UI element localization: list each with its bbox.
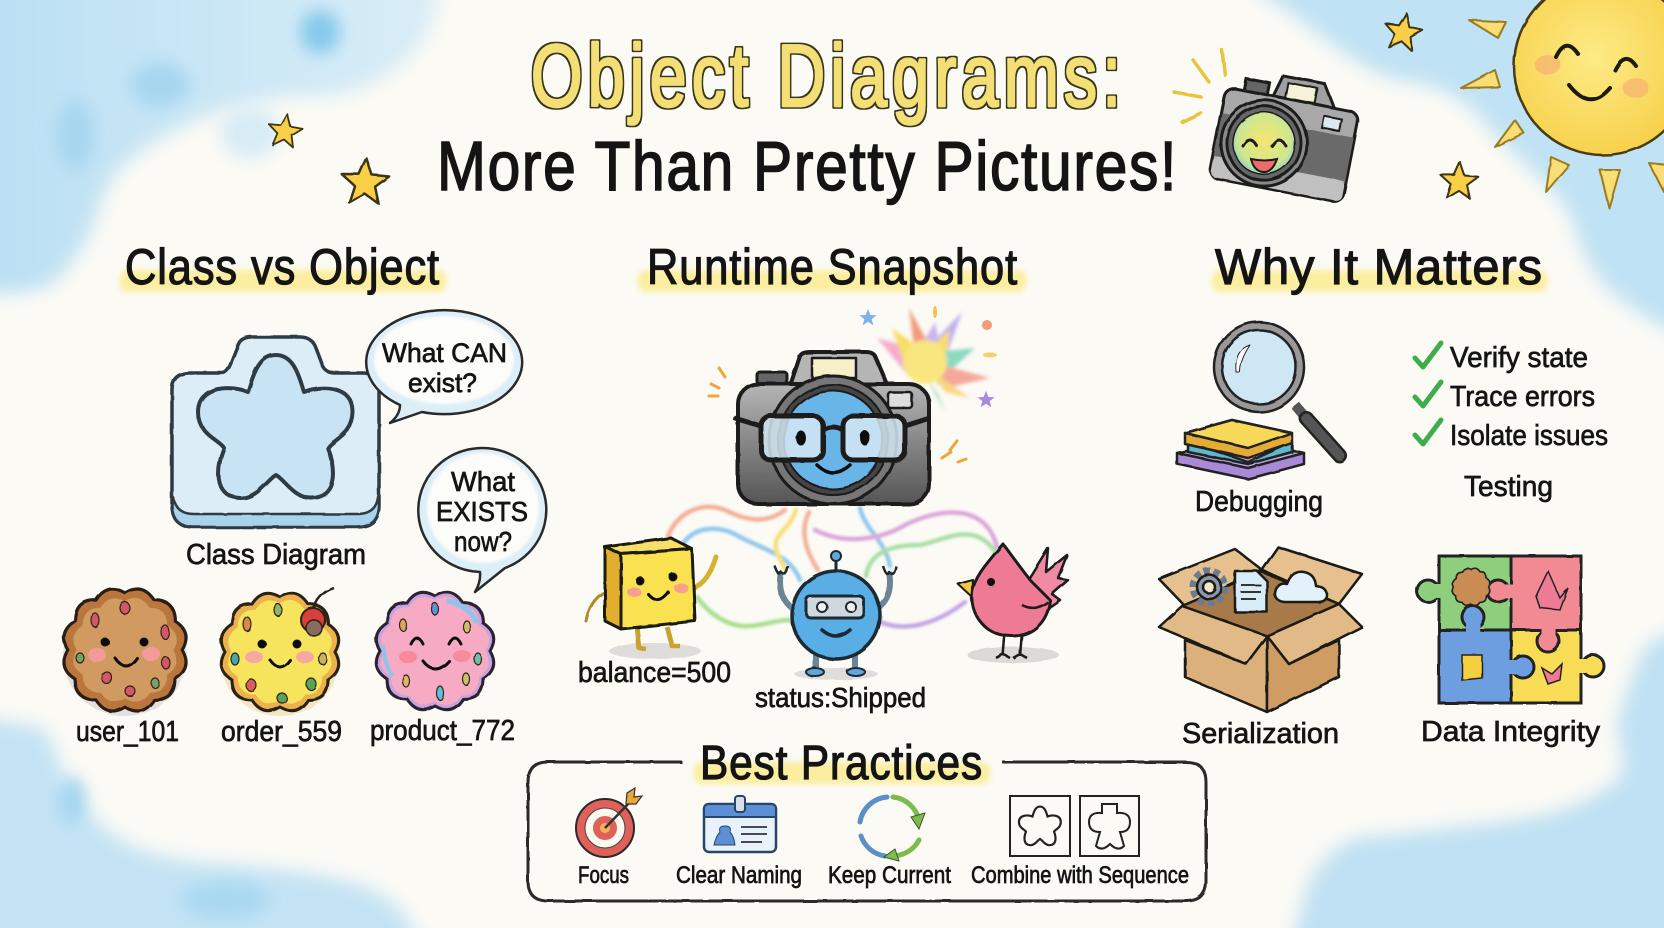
label: Serialization: Serialization [1182, 718, 1339, 750]
title line 2: More Than Pretty Pictures! [437, 127, 1178, 205]
camera flash rays [1174, 50, 1225, 122]
books [1177, 420, 1304, 479]
character: pink bird [958, 544, 1068, 663]
check 3: Isolate issues [1450, 420, 1608, 452]
icon: name badge [704, 796, 776, 852]
rainbow burst [859, 306, 997, 412]
check 1: Verify state [1450, 342, 1588, 374]
heading highlight [638, 270, 1026, 292]
burst sparks [859, 306, 997, 407]
speech bubble: What EXISTS now?: EXISTS [436, 496, 528, 527]
label: order_559: order_559 [221, 716, 342, 748]
icon: target [576, 788, 642, 857]
heading highlight [120, 270, 446, 292]
gear [1194, 572, 1224, 602]
watercolor sky wash: top left [0, 0, 437, 294]
icon: smiling camera [1174, 50, 1364, 203]
lens face [1243, 140, 1286, 172]
label: Debugging: Debugging [1195, 486, 1323, 518]
watercolor sky wash: top right [1228, 0, 1664, 340]
cloud [1275, 572, 1327, 602]
cookie: product_772 [376, 592, 494, 710]
icon: paired diagrams [1010, 796, 1139, 856]
document [1235, 571, 1267, 612]
camera with glasses [734, 352, 930, 504]
label: Clear Naming: Clear Naming [676, 862, 802, 889]
title line 1: Object Diagrams: [531, 26, 1126, 125]
label: Testing: Testing [1464, 471, 1553, 503]
title [437, 26, 1178, 205]
watercolor sky wash: bottom left [0, 717, 424, 928]
panel: class vs object [63, 310, 546, 748]
icon: magnifier on books [1177, 322, 1340, 479]
flash ticks [709, 368, 966, 462]
icon: refresh cycle [860, 797, 925, 861]
cherry [301, 588, 334, 636]
icon: open box [1159, 547, 1362, 712]
star 4 [1439, 161, 1479, 199]
label: status:Shipped: status:Shipped [755, 682, 926, 713]
label: Keep Current: Keep Current [828, 862, 951, 889]
sun rays [1461, 20, 1664, 208]
sun face [1535, 46, 1649, 99]
star 1 [266, 112, 304, 149]
heading: Best Practices: Best Practices [700, 737, 983, 790]
speech bubble: What CAN exist? [366, 310, 522, 423]
speech bubble: What CAN exist?: exist? [408, 368, 477, 398]
class mold [172, 337, 379, 527]
speech bubble: What CAN exist?: What CAN [382, 338, 507, 368]
speech bubble: What EXISTS now?: What [451, 466, 515, 497]
cookie: user_101 [63, 589, 187, 716]
label: user_101: user_101 [76, 716, 179, 748]
puzzle minis [1452, 568, 1568, 684]
heading: Runtime Snapshot: Runtime Snapshot [647, 239, 1018, 295]
stars [266, 10, 1479, 204]
panel: why it matters [1159, 322, 1608, 750]
character: yellow box [586, 538, 716, 659]
icon: puzzle [1417, 556, 1604, 703]
label: Data Integrity: Data Integrity [1421, 716, 1601, 748]
heading: Class vs Object: Class vs Object [125, 239, 440, 295]
label: Combine with Sequence: Combine with Sequence [971, 862, 1189, 889]
label: balance=500: balance=500 [578, 657, 731, 689]
watercolor sky wash: bottom right [1288, 620, 1664, 928]
label: Class Diagram: Class Diagram [186, 539, 366, 571]
panel: best practices [528, 737, 1206, 901]
checklist [1415, 342, 1608, 452]
heading highlight [1212, 270, 1547, 292]
glasses [734, 416, 930, 460]
star 2 [340, 157, 390, 204]
heading highlight [694, 762, 990, 784]
heading: Why It Matters: Why It Matters [1215, 239, 1543, 295]
camera body [1208, 65, 1364, 203]
label: product_772: product_772 [370, 715, 515, 747]
connecting ribbons [668, 507, 997, 626]
handle [1295, 405, 1306, 418]
panel: runtime snapshot [578, 306, 1068, 713]
cookie: order_559 [220, 588, 340, 716]
sun disc [1514, 0, 1664, 155]
lens [1214, 322, 1304, 412]
check 2: Trace errors [1450, 381, 1595, 413]
label: Focus: Focus [578, 862, 629, 889]
sun [1461, 0, 1664, 208]
speech bubble: What EXISTS now? [418, 448, 546, 592]
speech bubble: What EXISTS now?: now? [454, 526, 512, 557]
character: robot [775, 551, 896, 680]
face [796, 431, 870, 472]
frame [528, 762, 1206, 901]
star 3 [1381, 10, 1425, 52]
